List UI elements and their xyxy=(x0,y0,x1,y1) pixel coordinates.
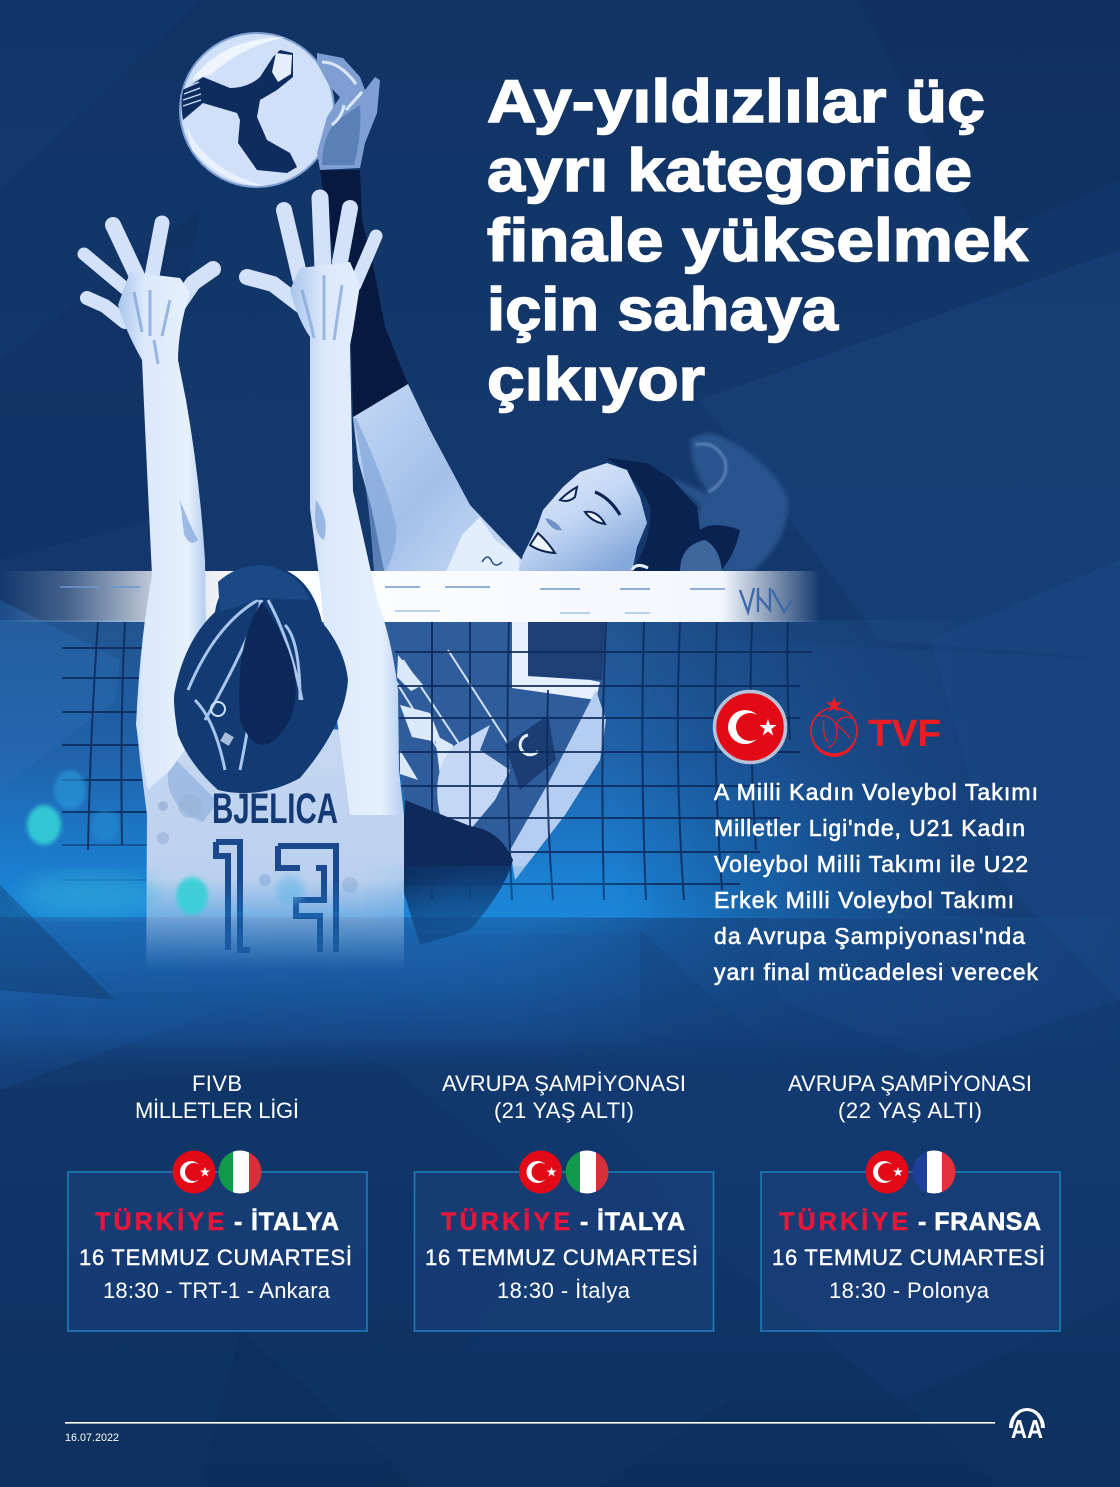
volleyball xyxy=(180,33,334,187)
volleyball net top band xyxy=(0,571,820,622)
match title xyxy=(441,1207,685,1236)
panel: match 1 Türkiye vs Italy xyxy=(68,1071,367,1331)
blocker: hair xyxy=(174,565,348,793)
blocker: right hand and arm xyxy=(247,198,404,815)
attacker: hair xyxy=(607,458,740,572)
heading: (21 YAŞ ALTI) xyxy=(494,1098,634,1123)
description text xyxy=(714,779,1038,985)
title: finale yükselmek xyxy=(487,207,1029,274)
fade and bokeh lights xyxy=(20,770,650,928)
title: ayrı kategoride xyxy=(487,137,972,204)
title: çıkıyor xyxy=(487,346,705,413)
icon: Turkish flag badge xyxy=(714,692,786,762)
match title: - FRANSA xyxy=(918,1208,1041,1236)
net background glow and floor xyxy=(0,600,1120,1090)
icon: AA logo: AA xyxy=(1011,1414,1043,1444)
volleyball net mesh xyxy=(62,622,812,900)
icon: TVF logo xyxy=(811,697,941,757)
match title xyxy=(95,1207,339,1236)
heading: MİLLETLER LİGİ xyxy=(135,1098,299,1123)
heading xyxy=(135,1071,299,1123)
blocker: left hand and arm xyxy=(84,223,213,790)
blocker: back and jersey xyxy=(136,722,404,985)
jersey number three xyxy=(278,846,336,952)
title: için sahaya xyxy=(487,276,839,343)
panel: match 3 Türkiye vs France U22 xyxy=(761,1071,1060,1331)
description text: da Avrupa Şampiyonası'nda xyxy=(714,923,1025,949)
match title: - İTALYA xyxy=(580,1208,685,1236)
match title: TÜRKİYE xyxy=(95,1207,224,1236)
heading: AVRUPA ŞAMPİYONASI xyxy=(788,1071,1032,1096)
heading xyxy=(442,1071,686,1123)
time and venue: 18:30 - TRT-1 - Ankara xyxy=(103,1278,331,1303)
match title: TÜRKİYE xyxy=(779,1207,908,1236)
date: 16 TEMMUZ CUMARTESİ xyxy=(425,1245,698,1270)
footer date: 16.07.2022 xyxy=(65,1432,119,1444)
title: Ay-yıldızlılar üç xyxy=(487,68,985,135)
attacker: jersey collar xyxy=(446,517,519,572)
flags xyxy=(519,1150,610,1194)
description text: yarı final mücadelesi verecek xyxy=(714,959,1038,985)
description text: A Milli Kadın Voleybol Takımı xyxy=(714,779,1038,805)
heading: AVRUPA ŞAMPİYONASI xyxy=(442,1071,686,1096)
attacker: jersey and body behind net xyxy=(385,620,606,945)
heading: (22 YAŞ ALTI) xyxy=(838,1098,982,1123)
time and venue: 18:30 - İtalya xyxy=(497,1278,631,1303)
description text: Voleybol Milli Takımı ile U22 xyxy=(714,851,1028,877)
match title: - İTALYA xyxy=(234,1208,339,1236)
footer rule xyxy=(65,1422,995,1424)
match title: TÜRKİYE xyxy=(441,1207,570,1236)
match title xyxy=(779,1207,1041,1236)
date: 16 TEMMUZ CUMARTESİ xyxy=(772,1245,1045,1270)
attacker: face xyxy=(518,463,648,572)
panel: match 2 Türkiye vs Italy U21 xyxy=(414,1071,714,1331)
heading: FIVB xyxy=(192,1071,242,1096)
description text: Erkek Milli Voleybol Takımı xyxy=(714,887,1014,913)
title xyxy=(487,68,1029,413)
flags xyxy=(172,1150,263,1194)
attacker: hand on ball xyxy=(317,53,380,170)
flags xyxy=(866,1150,957,1194)
time and venue: 18:30 - Polonya xyxy=(829,1278,990,1303)
jersey name: BJELICA xyxy=(212,785,338,833)
attacker: flying hair wisp xyxy=(672,433,788,572)
icon: TVF logo: TVF xyxy=(868,713,941,755)
date: 16 TEMMUZ CUMARTESİ xyxy=(79,1245,352,1270)
heading xyxy=(788,1071,1032,1123)
jersey number one xyxy=(216,842,250,950)
attacker: sleeve and upper arm xyxy=(320,170,522,575)
description text: Milletler Ligi'nde, U21 Kadın xyxy=(714,815,1025,841)
